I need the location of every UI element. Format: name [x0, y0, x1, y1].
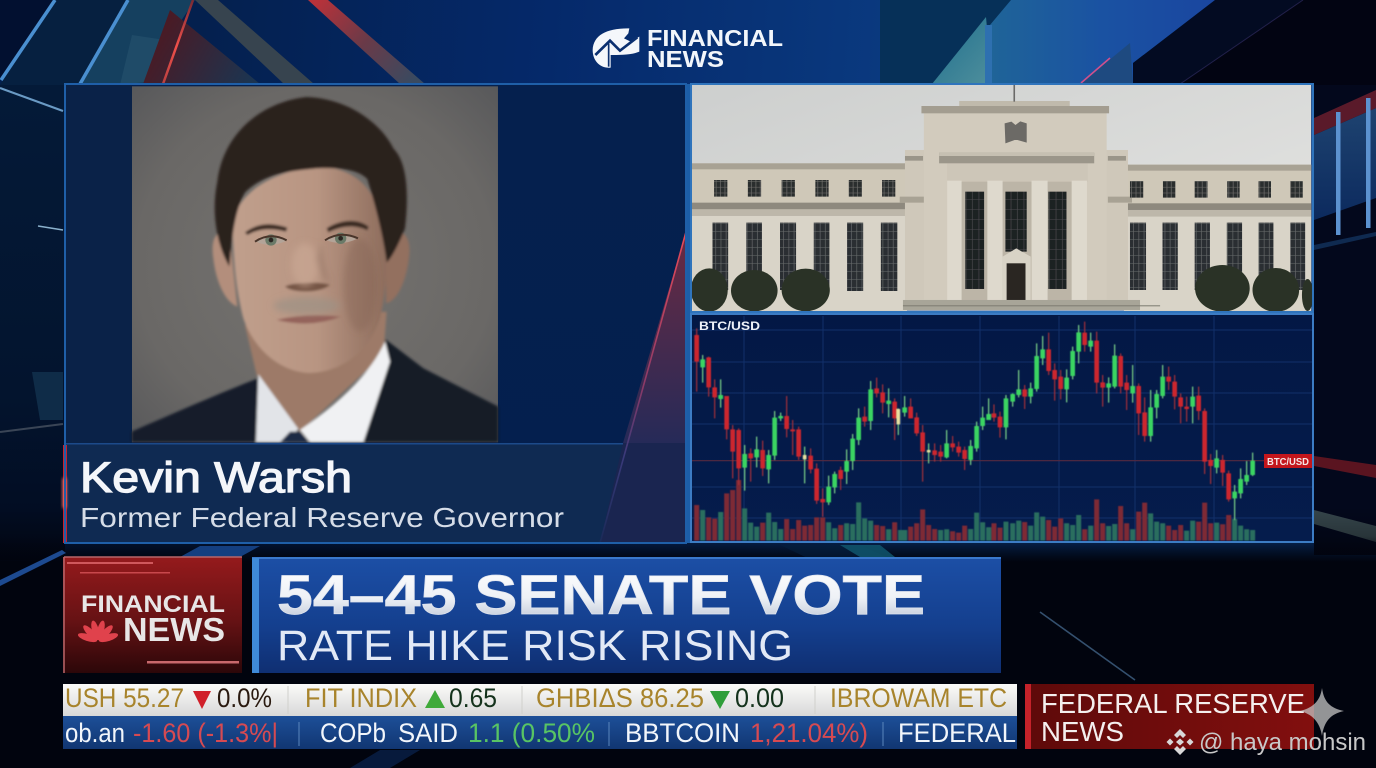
icon: sparkle [1300, 688, 1344, 736]
ticker: top row: 0.00 [735, 683, 784, 713]
panel: red Financial News bug: NEWS [123, 611, 225, 648]
trees [691, 265, 1313, 312]
panel: red Financial News bug [63, 557, 242, 673]
ticker: top row: GHBIΔS 86.25 [536, 683, 704, 713]
left wing [692, 163, 907, 311]
logo: Financial News: NEWS [647, 46, 724, 72]
price tag: BTC/USD [1267, 456, 1309, 468]
volume bars [697, 480, 1253, 541]
ticker: top row: 0.65 [449, 683, 497, 713]
columns [947, 181, 962, 300]
centre block [924, 110, 1107, 302]
icon: peacock [77, 620, 119, 644]
ticker: bottom row: FEDERAL [898, 718, 1016, 748]
name bar [62, 443, 686, 543]
panel: BTC/USD chart [691, 314, 1313, 542]
ticker: top row: IBROWAM ETC [830, 683, 1007, 713]
hair [215, 97, 407, 267]
panel: Federal Reserve News tag [1025, 684, 1314, 749]
watermark: @ haya mohsin [1199, 729, 1366, 756]
icon: logo mark [593, 28, 639, 68]
ticker: bottom row: COPb [320, 718, 386, 748]
icon: up arrow [425, 690, 445, 708]
ears [213, 233, 237, 307]
icon: diamond logo [1166, 729, 1194, 755]
ticker: bottom row: SAID [398, 718, 458, 748]
portrait photo [132, 86, 498, 442]
panel: Federal Reserve News tag: NEWS [1041, 716, 1124, 747]
role: Former Federal Reserve Governor [80, 502, 564, 533]
ticker: bottom row [63, 716, 1017, 749]
icon: down arrow [193, 691, 211, 709]
grid [692, 316, 1312, 540]
mouth [277, 315, 341, 323]
windows [714, 180, 1303, 198]
panel: Federal Reserve building photo [691, 84, 1313, 312]
soft facial shading [273, 238, 377, 332]
eagle [1005, 121, 1027, 143]
watermark [1166, 688, 1366, 756]
ticker: bottom row: ob.an [65, 718, 125, 748]
panel: headline banner [252, 557, 1001, 673]
ticker: bottom row: 1.1 (0.50% [468, 718, 595, 748]
text: FINANCIAL [81, 591, 225, 618]
headline: 54–45 SENATE VOTE [277, 563, 925, 626]
right strip [1314, 85, 1376, 555]
logo: Financial News [593, 25, 783, 72]
right wing [1124, 165, 1311, 311]
neck [245, 312, 387, 432]
candlesticks [697, 322, 1253, 520]
price line [692, 460, 1265, 462]
flagpole [1013, 85, 1015, 102]
eyes [255, 233, 358, 246]
steps [903, 300, 1140, 310]
subheadline: RATE HIKE RISK RISING [277, 622, 793, 670]
chart label: BTC/USD [699, 319, 760, 333]
panel: Federal Reserve News tag: FEDERAL RESERVE [1041, 688, 1305, 719]
ticker: bottom row: BBTCOIN [625, 718, 740, 748]
ticker: bottom row: -1.60 (-1.3%| [133, 718, 278, 748]
centre windows and door [965, 192, 984, 289]
face [233, 167, 386, 373]
name: Kevin Warsh [80, 454, 352, 502]
top right shards [990, 0, 1215, 85]
brows [245, 224, 287, 235]
portico [947, 163, 1088, 182]
nose underside [285, 283, 330, 291]
side blocks [905, 150, 927, 300]
logo text: FINANCIAL [647, 25, 783, 51]
ticker: top row: USH 55.27 [65, 683, 184, 713]
tie [280, 432, 309, 442]
panel: Kevin Warsh portrait and name [62, 84, 691, 543]
left strip [0, 85, 65, 560]
icon: down arrow [710, 691, 730, 709]
shirt collar [256, 374, 298, 442]
ticker: top row: FIT INDIX [305, 683, 417, 713]
ticker: top row [63, 683, 1017, 716]
ticker: bottom row: 1,21.04%) [750, 718, 868, 748]
suit [132, 378, 258, 442]
ticker: top row: 0.0% [217, 683, 272, 713]
